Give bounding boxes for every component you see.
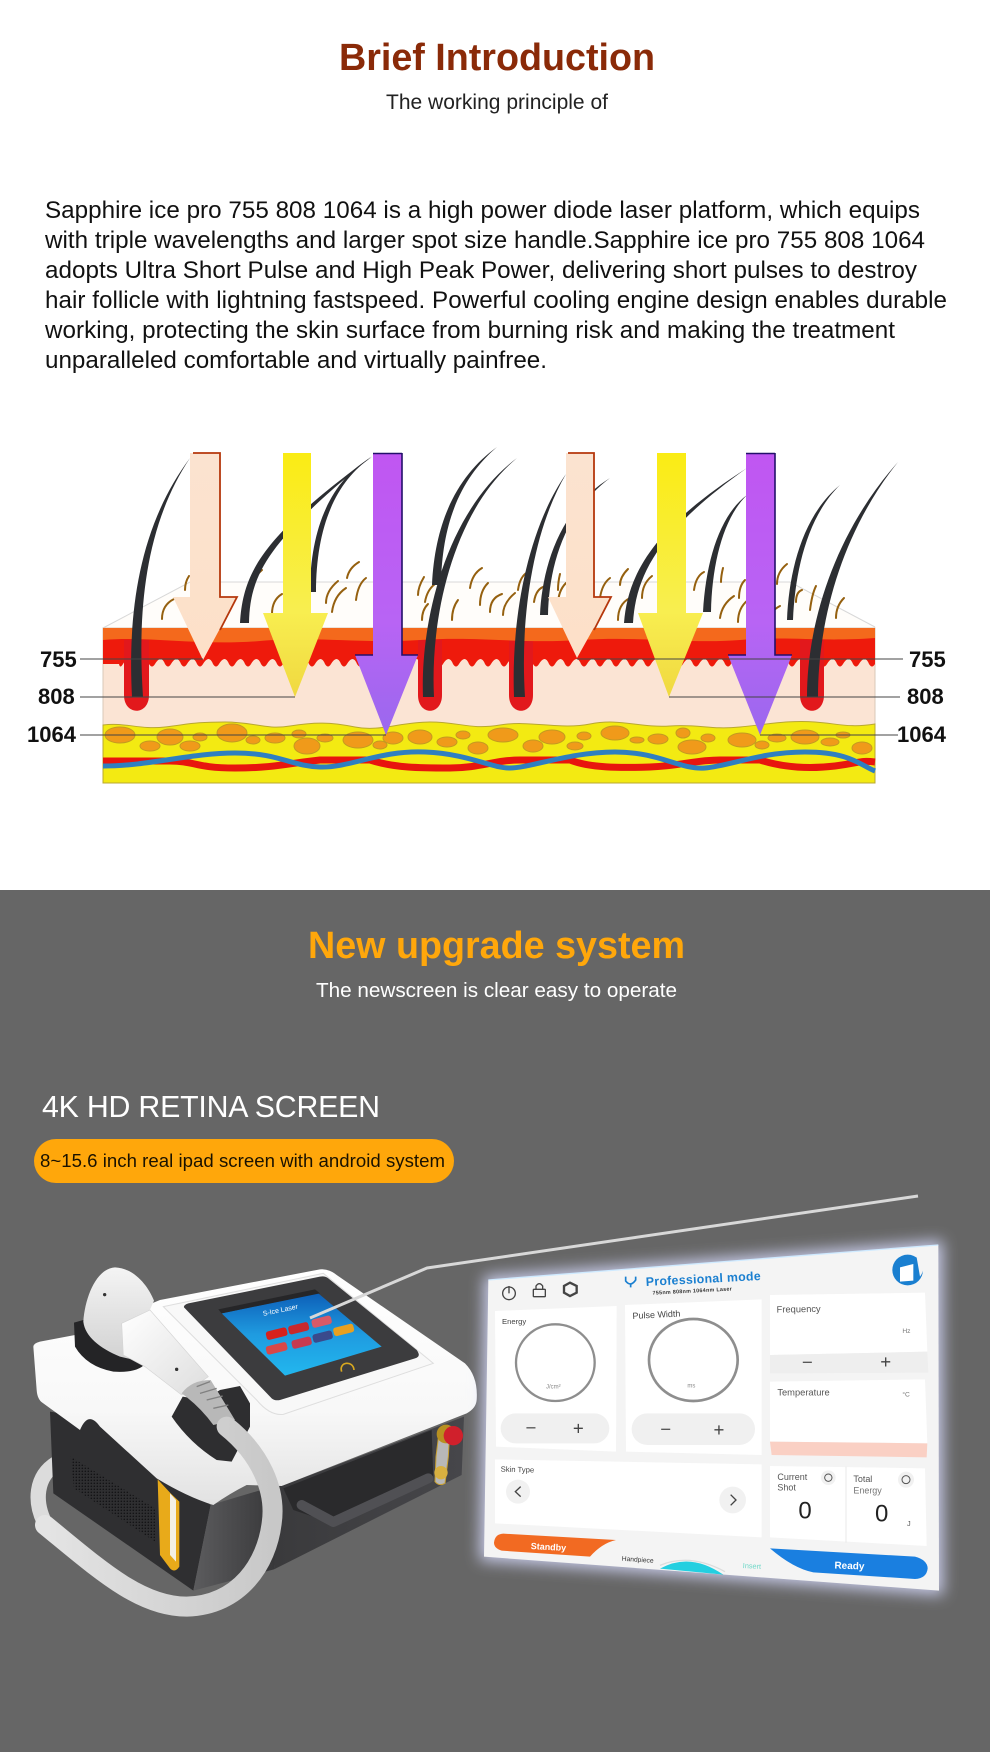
handpiece head — [83, 1267, 154, 1360]
device lcd — [222, 1293, 382, 1376]
callout: screen size pill: 8~15.6 inch real ipad screen with android system — [40, 1150, 445, 1171]
lcd brand text: S-Ice Laser — [262, 1304, 299, 1318]
button: ready: Ready — [834, 1560, 865, 1573]
card: pulse width: Pulse Width — [632, 1309, 681, 1321]
text block: description paragraph: hair follicle with lightning fastspeed. Powerful cooling engine design enables durable — [45, 287, 947, 314]
body left face — [50, 1412, 211, 1591]
follicles — [124, 640, 824, 711]
handle recess — [283, 1430, 433, 1523]
handpiece arm — [122, 1310, 208, 1395]
card: frequency: Frequency — [777, 1304, 821, 1315]
card: temperature: °C — [902, 1390, 910, 1398]
card: pulse width: − — [660, 1418, 671, 1439]
card: temperature: Temperature — [777, 1387, 830, 1397]
card: energy: − — [526, 1417, 536, 1438]
title: New upgrade system: New upgrade system — [308, 924, 685, 966]
lcd header strip — [218, 1289, 320, 1313]
card: frequency: − — [802, 1352, 813, 1373]
wavelength labels: 755 — [909, 647, 946, 672]
emergency button — [437, 1425, 463, 1445]
card: energy: Energy — [502, 1317, 526, 1326]
shell raised panel — [163, 1273, 433, 1414]
skin top orange band — [103, 628, 875, 642]
callout: screen size pill — [34, 1139, 454, 1183]
text block: description paragraph: with triple wavelengths and larger spot size handle.Sapphire ice pro 755 808 1064 — [44, 227, 925, 254]
silver plate — [435, 1427, 450, 1485]
text block: description paragraph: adopts Ultra Short Pulse and High Peak Power, delivering short pulses to destroy — [45, 257, 918, 284]
vent mesh — [71, 1457, 155, 1542]
text block: description paragraph: working, protecting the skin surface from burning risk and making the treatment — [44, 317, 895, 344]
wavelength labels — [27, 647, 947, 747]
skin dermis layer — [103, 628, 875, 783]
handpiece status — [622, 1556, 761, 1575]
card: temperature — [770, 1379, 927, 1457]
button: standby — [494, 1534, 616, 1557]
gold logo — [341, 1363, 354, 1372]
card: pulse width — [625, 1299, 762, 1455]
icon: globe — [892, 1255, 923, 1285]
lcd flags — [265, 1315, 355, 1355]
body front corner face — [193, 1483, 283, 1591]
fat cells — [105, 724, 872, 754]
fat layer — [103, 721, 875, 783]
chart: skin cross-section with laser wavelengths — [27, 447, 947, 783]
card: pulse width: + — [714, 1419, 724, 1440]
card: skin type: Skin Type — [501, 1465, 534, 1475]
card: current shot and total energy: Energy — [853, 1486, 882, 1496]
long black hairs — [131, 447, 898, 697]
panel: new upgrade system background — [0, 890, 990, 1752]
cable rear loop — [38, 1463, 57, 1527]
panel: enlarged touch screen UI — [484, 1245, 939, 1591]
blood vessels — [103, 752, 875, 771]
icon: lock — [533, 1284, 545, 1297]
arrow: 755 peach left — [173, 453, 237, 660]
card: energy — [495, 1306, 617, 1452]
handpiece status: Insert — [743, 1561, 761, 1571]
card: skin type — [495, 1459, 762, 1537]
holder front block — [172, 1386, 250, 1462]
button: standby: Standby — [531, 1541, 566, 1553]
wavelength guide lines — [80, 659, 903, 735]
wavelength labels: 1064 — [897, 722, 947, 747]
holder rear — [74, 1320, 147, 1372]
icon: laser device — [33, 1267, 477, 1607]
screen title: Professional mode — [645, 1269, 761, 1289]
icon: power — [503, 1286, 515, 1300]
skin epidermis red layer — [103, 628, 875, 666]
card: energy: + — [573, 1418, 584, 1439]
screen subtitle: 755nm 808nm 1064nm Laser — [652, 1287, 732, 1297]
body right face — [274, 1417, 464, 1569]
card: energy: J/cm² — [546, 1384, 561, 1390]
subtitle: screen description: The newscreen is clear easy to operate — [316, 979, 677, 1002]
handpiece status: Handpiece — [622, 1556, 654, 1565]
cable — [45, 1427, 273, 1607]
card: frequency — [770, 1293, 928, 1373]
screen glow — [484, 1245, 939, 1591]
top blue edge — [488, 1245, 938, 1280]
panel: brief introduction background — [0, 0, 990, 890]
screen bezel — [184, 1276, 419, 1400]
card: current shot and total energy: Current — [777, 1472, 808, 1482]
title: Brief Introduction: Brief Introduction — [339, 36, 655, 78]
card: current shot and total energy: 0 — [798, 1497, 812, 1524]
arrow: 1064 purple left — [355, 453, 418, 735]
subtitle: working principle: The working principle of — [386, 91, 608, 114]
card: frequency: + — [880, 1351, 891, 1372]
card: current shot and total energy: Shot — [777, 1483, 796, 1493]
arrow: 808 yellow right — [638, 453, 703, 697]
white strip inside gold — [170, 1493, 176, 1562]
gold strip — [158, 1479, 179, 1570]
handpiece dots — [103, 1293, 178, 1371]
arrow: 755 peach right — [548, 453, 611, 658]
button: ready — [770, 1548, 928, 1579]
card: frequency: Hz — [902, 1328, 910, 1335]
card: current shot and total energy: 0 — [875, 1501, 888, 1528]
screen base — [484, 1245, 939, 1591]
text block: description paragraph: Sapphire ice pro 755 808 1064 is a high power diode laser platform, which equips — [45, 197, 920, 224]
text block: description paragraph — [44, 197, 947, 374]
icon: hexagon settings — [564, 1283, 577, 1296]
wavelength labels: 808 — [907, 684, 944, 709]
card: current shot and total energy — [770, 1466, 927, 1546]
card: current shot and total energy: J — [907, 1519, 911, 1528]
wavelength labels: 808 — [38, 684, 75, 709]
key switch — [434, 1466, 448, 1479]
skin surface outline — [103, 582, 875, 628]
card: current shot and total energy: Total — [853, 1474, 872, 1484]
white shell — [33, 1269, 477, 1505]
wavelength labels: 1064 — [27, 722, 77, 747]
text block: description paragraph: unparalleled comfortable and virtually painfree. — [45, 347, 547, 374]
wavelength labels: 755 — [40, 647, 77, 672]
header icons — [503, 1283, 577, 1300]
handpiece neck rings — [182, 1380, 235, 1425]
heading: 4K HD retina screen: 4K HD RETINA SCREEN — [42, 1091, 380, 1124]
carry handle — [302, 1478, 428, 1522]
card: pulse width: ms — [687, 1383, 695, 1389]
arrow: 808 yellow left — [263, 453, 328, 697]
small orange hairs — [162, 562, 844, 622]
icon: stethoscope — [626, 1277, 636, 1287]
arrow: pointer line from device screen to enlarged UI — [310, 1196, 918, 1318]
arrow: 1064 purple right — [728, 453, 792, 735]
